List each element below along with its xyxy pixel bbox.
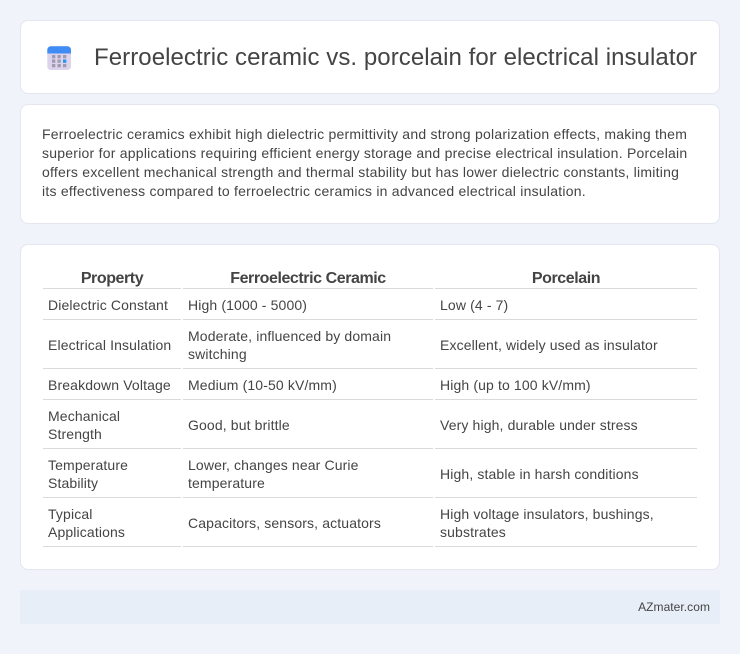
header card: [20, 20, 720, 94]
icon: calendar: [47, 46, 71, 70]
summary text: superior for applications requiring efficient energy storage and precise electrical insulation. Porcelain: [42, 145, 687, 161]
row: electrical insulation: Excellent, widely used as insulator: [440, 337, 658, 353]
summary text: Ferroelectric ceramics exhibit high dielectric permittivity and strong polarization effects, making them: [42, 126, 687, 142]
row: mechanical strength: Very high, durable under stress: [440, 417, 638, 433]
column headers: [81, 270, 600, 287]
row: breakdown voltage: High (up to 100 kV/mm): [440, 377, 591, 393]
row: breakdown voltage: Medium (10-50 kV/mm): [188, 377, 337, 393]
row: breakdown voltage: Breakdown Voltage: [48, 377, 171, 393]
row: temperature stability: High, stable in harsh conditions: [440, 466, 639, 482]
table card: [20, 244, 720, 570]
row: temperature stability: Temperature: [48, 457, 128, 473]
row: breakdown voltage: [48, 377, 591, 393]
summary card: [20, 104, 720, 224]
row: temperature stability: Stability: [48, 475, 98, 491]
column headers: Property: [81, 270, 143, 287]
row: temperature stability: temperature: [188, 475, 265, 491]
row: typical applications: Applications: [48, 524, 125, 540]
row: dielectric constant: Low (4 - 7): [440, 297, 508, 313]
row: mechanical strength: Good, but brittle: [188, 417, 290, 433]
row: temperature stability: [48, 457, 639, 491]
title: Ferroelectric ceramic vs. porcelain for electrical insulator: [94, 44, 697, 71]
row: mechanical strength: Strength: [48, 426, 102, 442]
row: electrical insulation: Moderate, influenced by domain: [188, 328, 391, 344]
row: typical applications: Typical: [48, 506, 92, 522]
row: typical applications: substrates: [440, 524, 506, 540]
summary text: its effectiveness compared to ferroelectric ceramics in advanced electrical insulation.: [42, 183, 586, 199]
row: electrical insulation: switching: [188, 346, 247, 362]
row: dielectric constant: [48, 297, 508, 313]
row: typical applications: Capacitors, sensors, actuators: [188, 515, 381, 531]
comparison table: [43, 270, 697, 547]
footer credit: AZmater.com: [638, 600, 710, 614]
row: typical applications: High voltage insulators, bushings,: [440, 506, 654, 522]
row: temperature stability: Lower, changes near Curie: [188, 457, 359, 473]
row: electrical insulation: [48, 328, 658, 362]
column headers: Ferroelectric Ceramic: [230, 270, 386, 287]
row: mechanical strength: Mechanical: [48, 408, 120, 424]
footer bar: [20, 590, 720, 624]
summary text: offers excellent mechanical strength and thermal stability but has lower dielectric constants, limiting: [42, 164, 679, 180]
row: dielectric constant: Dielectric Constant: [48, 297, 168, 313]
row: mechanical strength: [48, 408, 638, 442]
row: dielectric constant: High (1000 - 5000): [188, 297, 307, 313]
column headers: Porcelain: [532, 270, 600, 287]
row: electrical insulation: Electrical Insulation: [48, 337, 171, 353]
summary text: [42, 126, 687, 199]
row: typical applications: [48, 506, 654, 540]
